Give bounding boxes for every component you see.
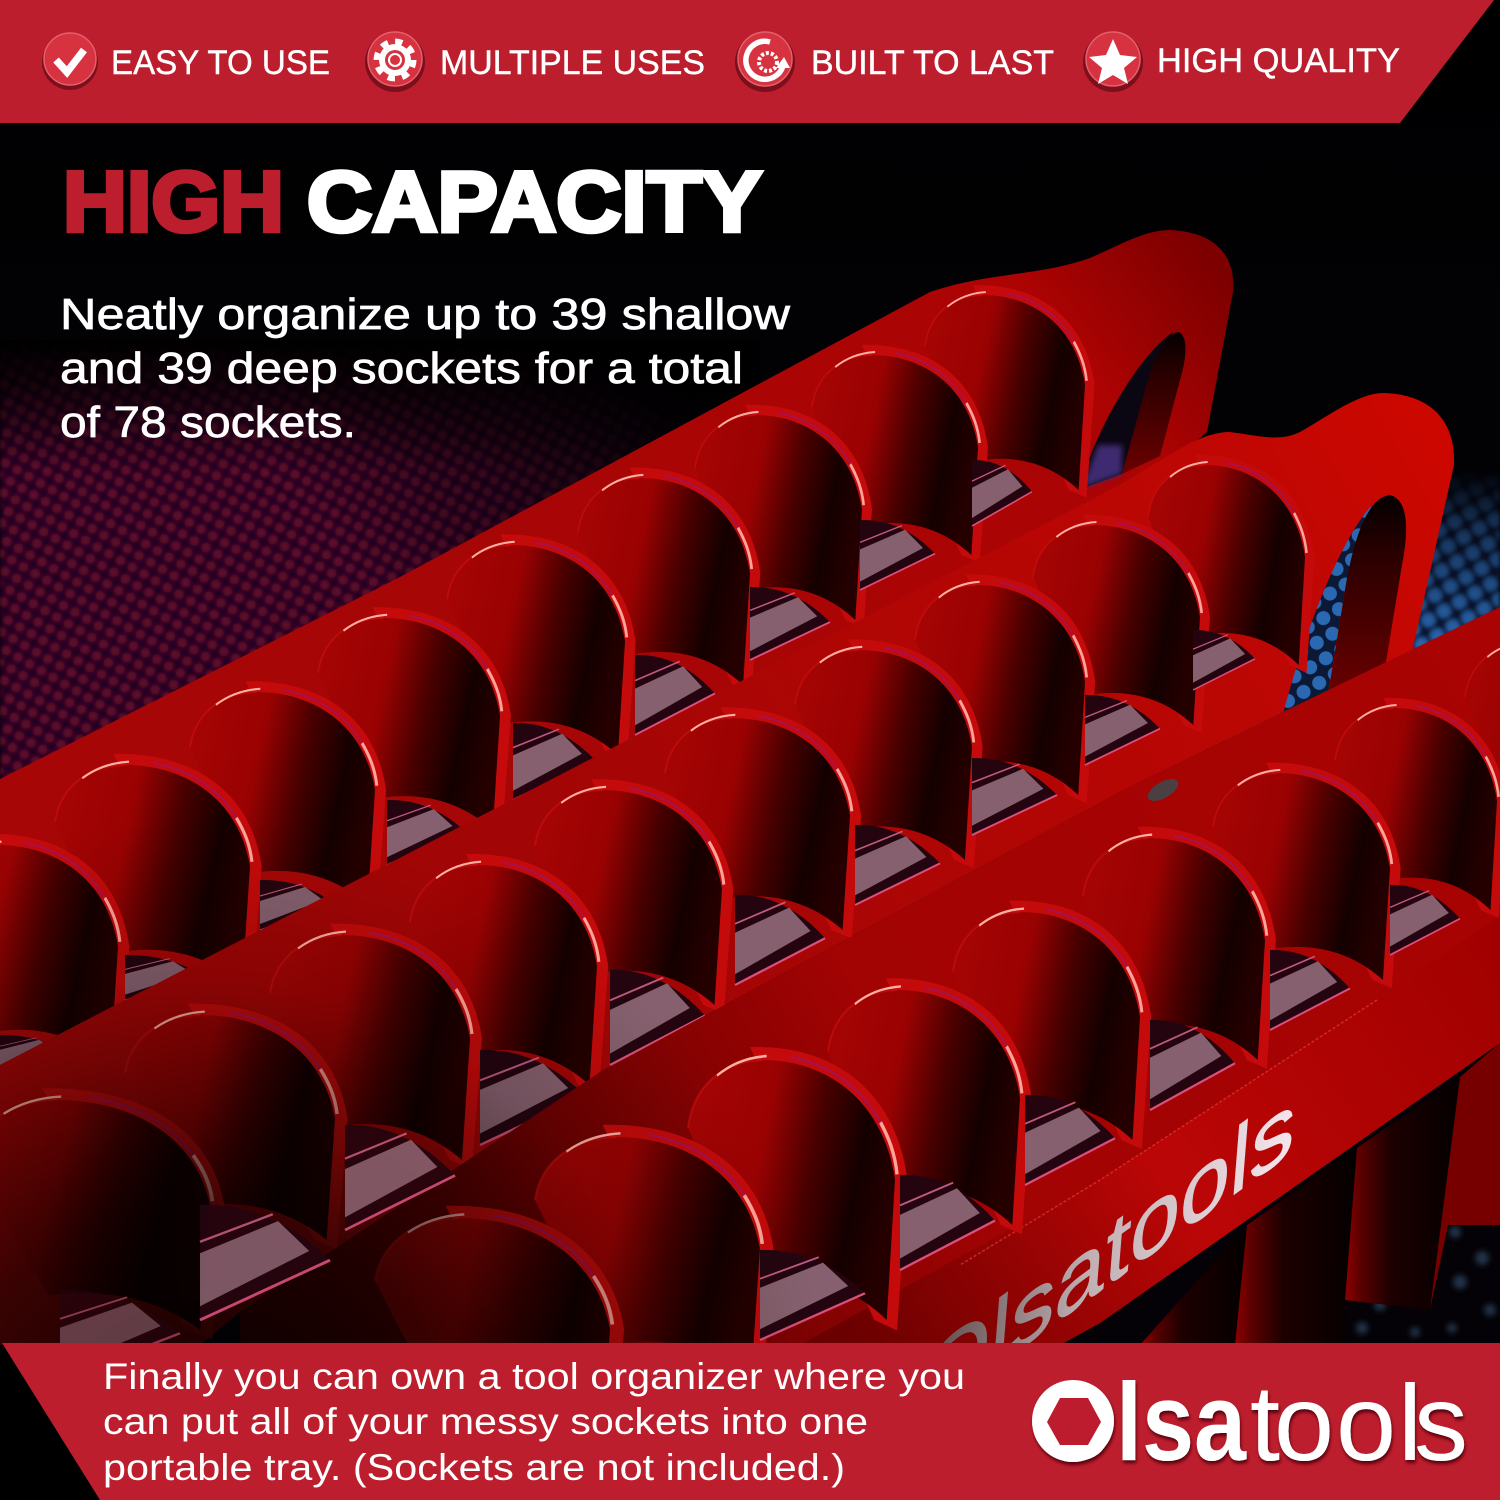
rail: middle row tray — [0, 393, 1454, 1345]
description text: Neatly organize up to 39 shallow — [60, 290, 790, 339]
footer text: can put all of your messy sockets into one — [103, 1401, 868, 1442]
mat dots: blue right — [1226, 476, 1500, 740]
footer text: portable tray. (Sockets are not included.) — [103, 1447, 845, 1488]
title: HIGH — [63, 155, 284, 250]
header banner — [0, 0, 1494, 123]
logo: Olsatools: lsa — [1116, 1361, 1247, 1484]
description text — [60, 290, 790, 447]
footer banner — [2, 1343, 1500, 1500]
description text: of 78 sockets. — [60, 398, 356, 447]
front wall bays — [1140, 1043, 1500, 1345]
icon: check — [42, 33, 98, 90]
logo: Olsatools: tools — [1250, 1362, 1468, 1483]
footer text — [103, 1356, 965, 1488]
pin in tray — [1144, 775, 1182, 805]
mat specks below tray — [1356, 1226, 1496, 1337]
rail: back row tray — [0, 230, 1233, 1080]
label: multiple uses: MULTIPLE USES — [440, 44, 705, 82]
title: CAPACITY — [307, 155, 762, 250]
description text: and 39 deep sockets for a total — [60, 344, 743, 393]
bottom left shadow — [0, 800, 1000, 1345]
footer text: Finally you can own a tool organizer where you — [103, 1356, 965, 1397]
label: high quality: HIGH QUALITY — [1157, 42, 1400, 80]
icon: cycle gear — [735, 32, 795, 92]
title — [63, 155, 762, 250]
mat dots: purple left — [0, 356, 660, 779]
engraved brand on tray: Olsatools — [916, 1065, 1300, 1442]
icon: gear — [365, 32, 425, 92]
lit socket inserts, lower left — [60, 1125, 455, 1380]
label: built to last: BUILT TO LAST — [811, 44, 1054, 82]
logo: Olsatools — [1032, 1361, 1468, 1484]
label: easy to use: EASY TO USE — [111, 44, 330, 82]
logo: Olsatools: O — [1037, 1370, 1115, 1482]
icon: star — [1083, 32, 1143, 92]
rail: front row tray — [240, 607, 1500, 1470]
